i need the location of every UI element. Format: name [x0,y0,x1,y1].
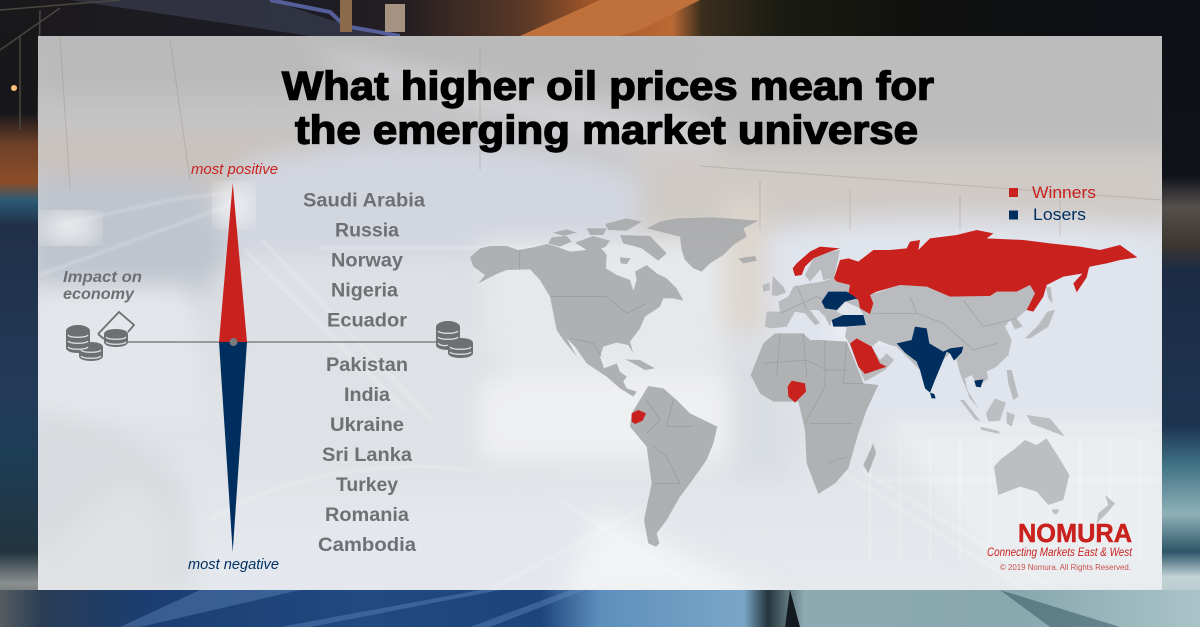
map: winners [788,230,1137,403]
list: winner countries [303,190,425,332]
list: winner countries: Nigeria [331,280,398,302]
needle pivot [230,338,238,346]
list: loser countries: Ukraine [330,415,404,436]
icon: coins and banknote [66,312,134,361]
map: Ecuador [632,410,646,424]
title: What higher oil prices mean for [282,64,934,108]
title [282,64,934,152]
logo: Nomura: NOMURA [1018,520,1132,548]
list: loser countries: Pakistan [326,355,408,376]
map: losers [822,292,983,398]
list: loser countries: Sri Lanka [322,445,412,466]
list: loser countries: India [344,385,390,406]
axis line [125,341,440,343]
list: loser countries: Romania [325,505,409,526]
logo: Nomura: Connecting Markets East & West [987,545,1133,559]
map: country borders [763,285,1017,463]
map: internal borders [519,250,693,483]
list: winner countries: Saudi Arabia [303,190,425,212]
map: Europe, Africa, Asia, Oceania [751,230,1137,523]
map: Americas and Greenland [470,217,758,547]
list: loser countries: Cambodia [318,535,416,556]
label: most negative: most negative [188,556,279,573]
needle: positive [219,183,247,342]
label: most positive: most positive [191,161,278,178]
label: impact on economy [63,269,142,303]
list: loser countries [318,355,416,556]
scale: diverging impact needle [125,183,440,552]
list: winner countries: Russia [335,220,399,242]
label: impact on economy: economy [63,286,135,303]
logo: Nomura [987,520,1133,572]
legend: winners: Winners [1032,184,1096,202]
needle: negative [219,342,247,552]
logo: Nomura: © 2019 Nomura. All Rights Reserved. [1000,563,1131,572]
label: impact on economy: Impact on [63,269,142,286]
list: loser countries: Turkey [336,475,398,496]
list: winner countries: Norway [331,250,403,272]
list: winner countries: Ecuador [327,310,408,332]
title: the emerging market universe [295,108,918,152]
legend: losers: Losers [1033,206,1086,224]
icon: coins right [436,321,473,358]
photo detail: railings and pipes [42,194,212,274]
world map [470,217,1137,547]
legend [1009,184,1096,224]
